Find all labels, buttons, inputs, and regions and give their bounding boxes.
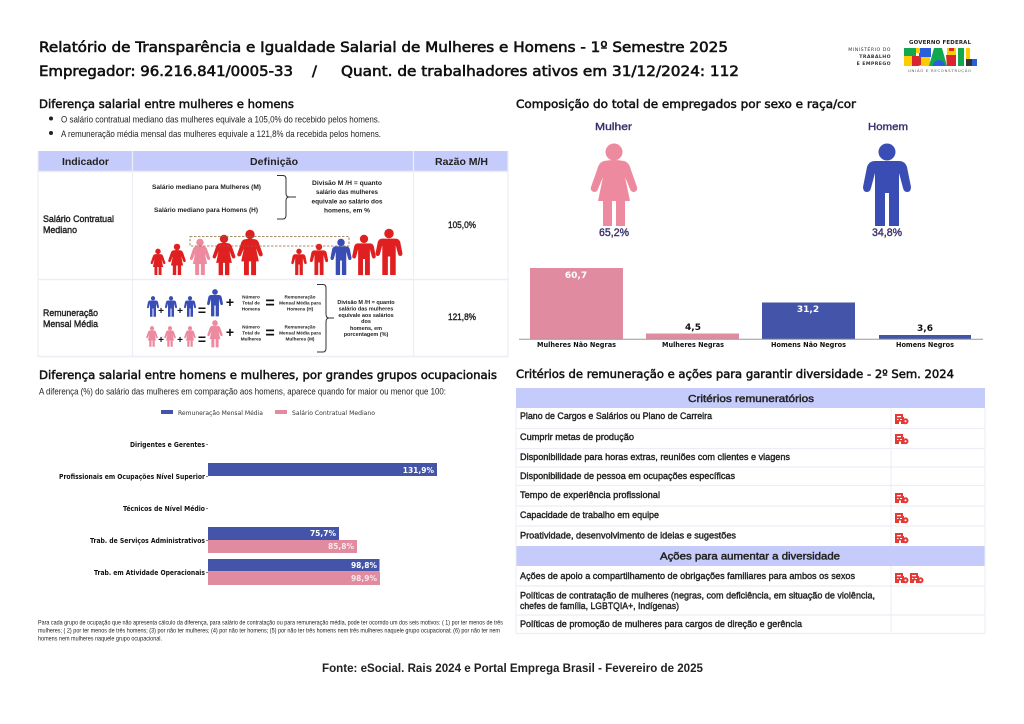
panel: diferença salarial xyxy=(38,97,508,357)
icon: mulher xyxy=(591,121,637,239)
table: critérios e ações xyxy=(516,388,985,634)
panel: critérios xyxy=(516,367,985,634)
bar chart: ocupações: 98,9% xyxy=(351,574,377,583)
bar chart: sexo e raça: 4,5 xyxy=(685,323,701,333)
logo: ministério: TRABALHO xyxy=(859,54,891,60)
logo: governo federal brasil: UNIÃO E RECONSTRUÇÃO xyxy=(908,68,971,73)
bar chart: sexo e raça: Mulheres Negras xyxy=(662,341,724,349)
definition: remuneração média: Remuneração xyxy=(284,324,316,330)
table: critérios e ações: Tempo de experiência profissional xyxy=(520,490,660,500)
definition: remuneração média xyxy=(146,284,395,352)
heading: Critérios de remuneração e ações para garantir diversidade - 2º Sem. 2024 xyxy=(516,367,954,381)
table: critérios e ações: Proatividade, desenvolvimento de ideias e sugestões xyxy=(520,530,737,540)
icon: mulher: Mulher xyxy=(595,121,633,133)
bar chart: sexo e raça: Homens Negros xyxy=(896,341,954,349)
heading: Diferença salarial entre mulheres e homens xyxy=(39,97,294,111)
table: critérios e ações: Disponibilidade de pessoa em ocupações específicas xyxy=(520,471,735,481)
definition: salário mediano: equivale ao salário dos xyxy=(312,198,383,206)
definition: remuneração média: Mensal Média para xyxy=(279,300,321,306)
definition: remuneração média: = xyxy=(198,331,206,347)
definition: salário mediano: Salário mediano para Mulheres (M) xyxy=(152,184,261,191)
table: critérios e ações: Ações de apoio a compartilhamento de obrigações familiares para ambos os sexos xyxy=(520,571,855,581)
definition: remuneração média: + xyxy=(158,306,164,317)
definition: remuneração média: Mulheres xyxy=(241,336,262,342)
table: critérios e ações: Critérios remuneratórios xyxy=(688,393,814,405)
definition: remuneração média: dos xyxy=(361,319,371,325)
icon: mulher: 65,2% xyxy=(599,227,629,239)
bar chart: sexo e raça xyxy=(519,268,983,349)
table: critérios e ações: Plano de Cargos e Salários ou Plano de Carreira xyxy=(520,411,712,421)
description: A diferença (%) do salário das mulheres em comparação aos homens, aparece quando for maior ou menor que 100: xyxy=(39,386,446,398)
definition: remuneração média: Mensal Média para xyxy=(279,330,321,336)
definition: remuneração média: + xyxy=(226,324,234,340)
footnote: mulheres; ( 2) por ter menos de três homens; (3) por não ter mulheres; (4) por não ter homens; (5) por não ter três homens nem três mulheres naquele grupo ocupacional; (6) por não ter nem xyxy=(38,628,500,634)
title: / xyxy=(312,64,317,80)
definition: remuneração média: homens, em xyxy=(350,326,382,332)
panel: grupos ocupacionais xyxy=(38,368,504,642)
table: indicadores: Razão M/H xyxy=(435,156,488,168)
definition: remuneração média: + xyxy=(177,335,183,346)
definition: remuneração média: + xyxy=(158,335,164,346)
icon: homem: Homem xyxy=(868,121,908,133)
heading: Diferença salarial entre homens e mulheres, por grandes grupos ocupacionais xyxy=(39,368,497,382)
source: Fonte: eSocial. Rais 2024 e Portal Emprega Brasil - Fevereiro de 2025 xyxy=(322,661,703,675)
bar chart: ocupações: Trab. em Atividade Operacionais xyxy=(94,569,205,577)
bullet list: A remuneração média mensal das mulheres equivale a 121,8% da recebida pelos homens. xyxy=(61,129,381,140)
icons: pessoas mediana xyxy=(151,229,402,275)
definition: remuneração média: Remuneração xyxy=(284,294,316,300)
title: Quant. de trabalhadores ativos em 31/12/2024: 112 xyxy=(341,64,739,80)
bar chart: ocupações xyxy=(59,441,437,585)
bullet list: O salário contratual mediano das mulheres equivale a 105,0% do recebido pelos homens. xyxy=(61,114,380,126)
definition: salário mediano: Salário mediano para Homens (H) xyxy=(154,207,258,214)
table: indicadores: Salário Contratual xyxy=(43,214,114,224)
definition: salário mediano: homens, em % xyxy=(324,208,370,214)
table: critérios e ações: Ações para aumentar a diversidade xyxy=(660,550,840,562)
definition: salário mediano xyxy=(152,176,383,219)
footnote xyxy=(38,620,504,642)
title xyxy=(39,40,739,80)
table: critérios e ações: Cumprir metas de produção xyxy=(520,432,634,442)
legend: Remuneração Mensal Média xyxy=(178,409,263,417)
bar chart: sexo e raça: 31,2 xyxy=(797,305,819,315)
definition: salário mediano: salário das mulheres xyxy=(316,189,378,196)
heading: Composição do total de empregados por sexo e raça/cor xyxy=(516,97,856,111)
title: Empregador: 96.216.841/0005-33 xyxy=(39,64,293,80)
bar chart: sexo e raça: 60,7 xyxy=(565,271,587,281)
definition: salário mediano: Divisão M /H = quanto xyxy=(312,180,382,187)
definition: remuneração média: + xyxy=(177,306,183,317)
definition: remuneração média: Divisão M /H = quanto xyxy=(337,300,395,306)
bar chart: sexo e raça: Homens Não Negros xyxy=(771,341,846,349)
table: indicadores: Mediano xyxy=(43,225,77,235)
bar chart: ocupações: 75,7% xyxy=(310,529,336,538)
definition: remuneração média: Homens xyxy=(242,306,261,312)
table: critérios e ações: Políticas de contratação de mulheres (negras, com deficiência, em situação de violência, xyxy=(520,590,875,600)
table: indicadores: 105,0% xyxy=(448,220,476,230)
table: indicadores: Remuneração xyxy=(43,308,98,318)
bar chart: sexo e raça: 3,6 xyxy=(917,324,933,334)
bar chart: sexo e raça: Mulheres Não Negras xyxy=(537,341,616,349)
bar chart: ocupações: Dirigentes e Gerentes xyxy=(130,441,205,449)
table: indicadores: Indicador xyxy=(62,156,109,168)
definition: remuneração média: Número xyxy=(242,324,260,330)
definition: remuneração média: Mulheres (M) xyxy=(286,336,315,342)
table: critérios e ações: chefes de família, LGBTQIA+, Indígenas) xyxy=(520,601,679,611)
definition: remuneração média: Total de xyxy=(242,330,260,336)
legend: Salário Contratual Mediano xyxy=(292,409,375,417)
bar chart: ocupações: 85,8% xyxy=(328,542,354,551)
definition: remuneração média: + xyxy=(226,294,234,310)
definition: remuneração média: = xyxy=(198,302,206,318)
definition: remuneração média: equivale aos salários xyxy=(338,313,394,319)
definition: remuneração média: salário das mulheres xyxy=(339,306,393,312)
table: indicadores: 121,8% xyxy=(448,312,476,322)
title: Relatório de Transparência e Igualdade Salarial de Mulheres e Homens - 1º Semestre 2025 xyxy=(39,40,728,56)
table: critérios e ações: Capacidade de trabalho em equipe xyxy=(520,510,659,520)
logo: ministério xyxy=(848,45,891,67)
table: critérios e ações: Disponibilidade para horas extras, reuniões com clientes e viagens xyxy=(520,452,790,462)
definition: remuneração média: porcentagem (%) xyxy=(344,332,388,338)
table: indicadores xyxy=(38,151,508,357)
bar chart: ocupações: 131,9% xyxy=(403,466,434,475)
icon: homem xyxy=(863,121,911,239)
logo: governo federal brasil: GOVERNO FEDERAL xyxy=(909,40,972,46)
logo: ministério: MINISTÉRIO DO xyxy=(848,45,891,53)
definition: remuneração média: = xyxy=(265,295,275,312)
table: indicadores: Mensal Média xyxy=(43,319,98,329)
logo: ministério: E EMPREGO xyxy=(857,61,891,67)
logo: governo federal brasil xyxy=(904,40,977,73)
footnote: Para cada grupo de ocupação que não apresenta cálculo da diferença, para salário de contratação ou para remuneração média, pode ter ocorrido um dos seis motivos: ( 1) por ter menos de três xyxy=(38,620,504,626)
definition: remuneração média: Homens (H) xyxy=(287,306,314,312)
bar chart: ocupações: Técnicos de Nível Médio xyxy=(123,505,205,513)
panel: composição xyxy=(516,97,983,349)
bar chart: ocupações: 98,8% xyxy=(351,561,377,570)
table: critérios e ações: Políticas de promoção de mulheres para cargos de direção e gerência xyxy=(520,619,802,629)
icons: marcadores vermelhos xyxy=(895,414,922,583)
legend xyxy=(161,409,375,417)
footnote: homens nem mulheres naquele grupo ocupacional. xyxy=(38,636,162,642)
icon: homem: 34,8% xyxy=(872,227,902,239)
definition: remuneração média: = xyxy=(265,325,275,342)
definition: remuneração média: Número xyxy=(242,294,260,300)
definition: remuneração média: Total de xyxy=(242,300,260,306)
bar chart: ocupações: Trab. de Serviços Administrativos xyxy=(90,537,205,545)
table: indicadores: Definição xyxy=(250,156,298,168)
bar chart: ocupações: Profissionais em Ocupações Nível Superior xyxy=(59,473,206,481)
bullet list xyxy=(49,114,381,140)
